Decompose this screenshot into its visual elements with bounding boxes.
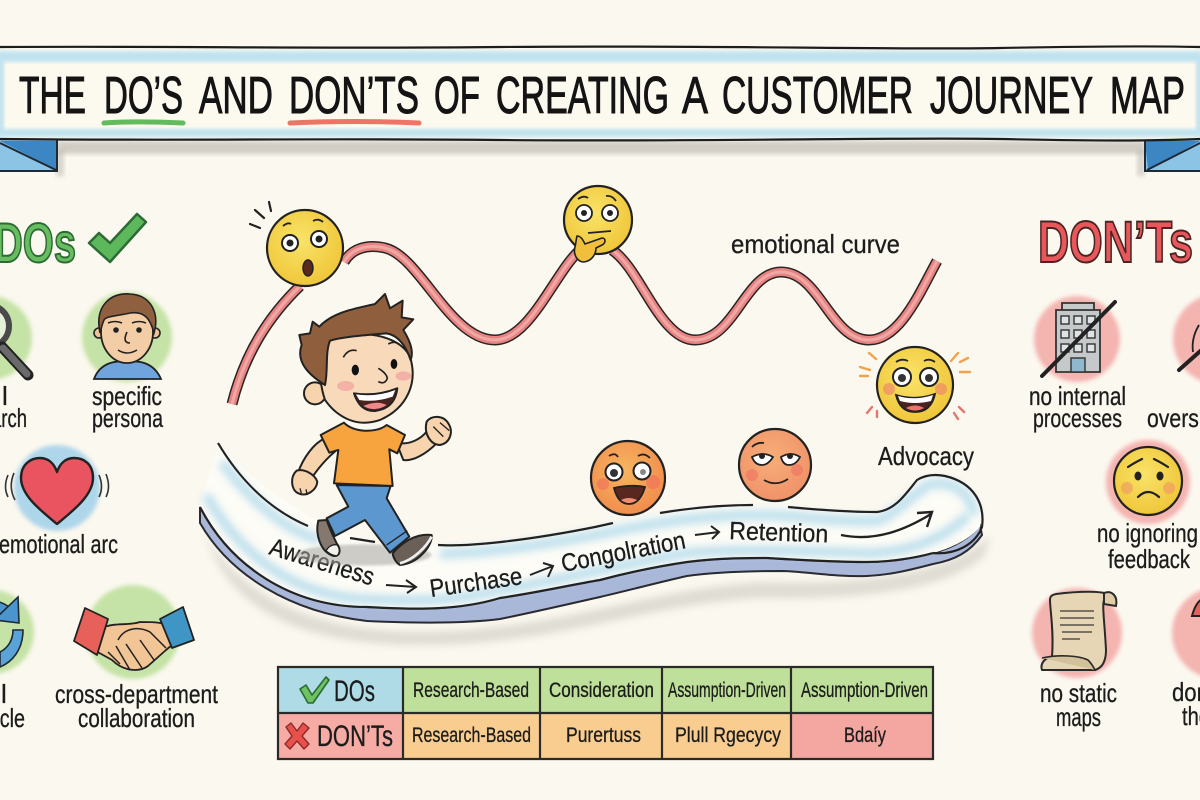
label: emotional arc: emotional arc bbox=[0, 529, 118, 559]
icon: table check bbox=[300, 677, 329, 703]
label: no static maps: maps bbox=[1056, 702, 1101, 732]
back shoe bbox=[317, 520, 340, 556]
stage: garbled consideration: Congolration bbox=[559, 526, 688, 578]
icon: check mark bbox=[89, 214, 146, 262]
head bbox=[320, 334, 413, 423]
row fills bbox=[278, 667, 933, 759]
panel: DON'Ts bbox=[1029, 210, 1200, 732]
road side band bbox=[200, 507, 982, 623]
shirt bbox=[321, 423, 405, 486]
icon: magnifying glass bbox=[0, 296, 32, 380]
label: research: l bbox=[2, 381, 8, 411]
label: specific persona bbox=[92, 381, 163, 433]
cell: research-based: Research-Based bbox=[412, 724, 531, 747]
cell: research-based: Research-Based bbox=[413, 679, 529, 702]
label: cycle: l bbox=[1, 679, 7, 709]
cell: garbled purchase: Purertuss bbox=[566, 724, 641, 747]
cell: DOs: DOs bbox=[334, 675, 375, 708]
road surface bbox=[200, 443, 981, 609]
road blue wash, upper edge bbox=[222, 462, 974, 554]
label: no static maps bbox=[1040, 678, 1117, 732]
road edges bbox=[218, 443, 983, 553]
road blue wash, lower edge bbox=[206, 495, 968, 600]
jeans bbox=[327, 485, 409, 553]
label: advocacy: Advocacy bbox=[878, 441, 974, 471]
label: cross-department collaboration bbox=[55, 679, 219, 733]
label: no internal processes bbox=[1029, 381, 1126, 433]
label: no internal processes: no internal bbox=[1029, 381, 1126, 411]
label: cross-department collaboration: collaboration bbox=[78, 703, 195, 733]
arrow bbox=[530, 563, 553, 577]
label: no static maps: no static bbox=[1040, 678, 1117, 708]
label: research bbox=[0, 381, 27, 433]
icon: excited orange face bbox=[591, 441, 665, 515]
cell: DON'Ts: DON’Ts bbox=[317, 720, 393, 753]
cheeks bbox=[337, 381, 354, 391]
label: no internal processes: processes bbox=[1033, 403, 1122, 433]
label: emotional curve: emotional curve bbox=[731, 229, 900, 259]
road shadow bbox=[205, 535, 990, 645]
icon: heart bbox=[6, 445, 108, 531]
eyes and brows bbox=[352, 365, 359, 375]
panel: DOs bbox=[0, 211, 219, 733]
banner fold left bbox=[0, 140, 57, 171]
mouth bbox=[354, 388, 397, 411]
hair bbox=[299, 294, 413, 385]
table: dos and don'ts bbox=[278, 667, 933, 759]
title text: OF bbox=[434, 67, 480, 125]
back arm bbox=[298, 438, 335, 478]
icon: table cross bbox=[285, 723, 309, 749]
icon: content orange face bbox=[739, 429, 811, 501]
stage: retention: Retention bbox=[729, 517, 829, 548]
cell: garbled text: Bdaíy bbox=[844, 724, 886, 747]
stage: purchase: Purchase bbox=[428, 562, 524, 603]
cell: assumption-driven: Assumption-Driven bbox=[668, 679, 786, 702]
icon: specific persona bbox=[82, 292, 172, 382]
label: specific persona: persona bbox=[92, 403, 163, 433]
icon: cropped warning bbox=[1172, 587, 1200, 679]
front shoe bbox=[393, 535, 432, 565]
title text: A bbox=[682, 67, 708, 125]
title text: JOURNEY bbox=[930, 67, 1093, 125]
icon: oversimplify bbox=[1173, 294, 1200, 384]
label: cross-department collaboration: cross-department bbox=[55, 679, 219, 709]
cell: garbled loyalty: Plull Rgecycy bbox=[675, 724, 781, 747]
title text: CUSTOMER bbox=[722, 67, 913, 125]
title text: CREATING bbox=[496, 67, 669, 125]
title text: DO’S bbox=[104, 67, 183, 125]
label: no ignoring feedback bbox=[1097, 518, 1198, 574]
icon: static map scroll bbox=[1032, 588, 1122, 678]
cell: assumption-driven: Assumption-Driven bbox=[801, 679, 928, 702]
journey road bbox=[200, 443, 990, 645]
arrow bbox=[386, 580, 416, 593]
arrow: to advocacy bbox=[841, 512, 932, 537]
banner fold right bbox=[1145, 140, 1200, 171]
chart: emotional curve bbox=[232, 229, 937, 404]
icon: sad face bbox=[1106, 440, 1190, 524]
red underline bbox=[290, 122, 419, 123]
title text: THE bbox=[19, 67, 86, 125]
icon: thinking face bbox=[564, 186, 632, 262]
icon: no internal processes bbox=[1034, 296, 1120, 382]
label: specific persona: specific bbox=[92, 381, 162, 411]
title text bbox=[19, 67, 1185, 125]
icon: handshake bbox=[74, 585, 194, 679]
icon: cycle arrows bbox=[0, 590, 34, 674]
ear bbox=[304, 382, 326, 404]
character: boy walking bbox=[292, 294, 451, 566]
front arm bbox=[397, 432, 437, 460]
title banner bbox=[0, 46, 1200, 176]
label: don't ... the bbox=[1172, 677, 1200, 731]
title text: AND bbox=[199, 67, 273, 125]
title text: DON’TS bbox=[289, 67, 419, 125]
green underline bbox=[104, 122, 183, 123]
label: cycle bbox=[0, 679, 25, 733]
shadow bbox=[295, 544, 432, 566]
arrow bbox=[695, 526, 719, 539]
stage: awareness: Awareness bbox=[266, 533, 378, 591]
icon: happy face advocacy bbox=[860, 347, 970, 423]
cell: consideration: Consideration bbox=[549, 679, 654, 702]
icon: surprised face bbox=[250, 202, 343, 286]
